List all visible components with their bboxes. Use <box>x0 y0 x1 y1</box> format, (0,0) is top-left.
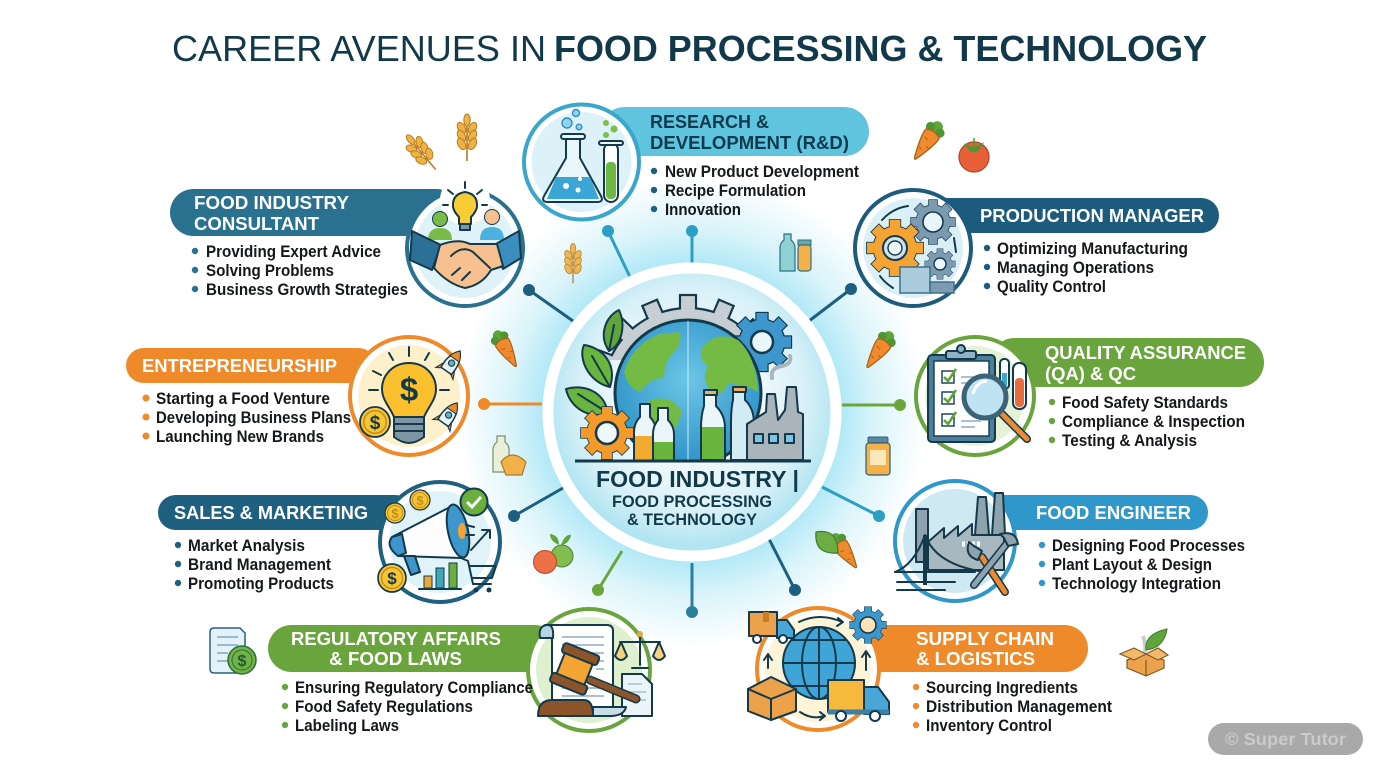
bullet list: Market Analysis <box>188 537 305 555</box>
badge circle <box>524 104 639 220</box>
icon: wheat centre-left <box>563 243 583 283</box>
panel: food industry consultant <box>170 175 523 306</box>
icon: gears and machine <box>863 198 963 298</box>
heading pill <box>990 338 1264 387</box>
icon: clipboard and magnifier <box>925 345 1027 446</box>
bullet list: Solving Problems <box>206 262 334 280</box>
icon: wheat left <box>399 128 444 176</box>
badge circle <box>895 481 1015 601</box>
icon: carrot left <box>487 326 524 371</box>
bullet list <box>175 537 334 593</box>
central hub <box>548 268 836 556</box>
heading pill <box>126 348 376 383</box>
icon: megaphone, coins and cart: $ <box>391 506 399 521</box>
panel: quality assurance <box>916 337 1264 455</box>
panel: food engineer <box>895 481 1245 601</box>
icon: factory <box>747 356 803 460</box>
heading pill <box>930 198 1219 233</box>
bullet list: Food Safety Regulations <box>295 698 473 716</box>
icon: wheat top <box>456 114 478 161</box>
bullet list: Promoting Products <box>188 575 334 593</box>
heading pill <box>268 625 558 672</box>
heading <box>194 193 349 234</box>
panel: supply chain <box>748 607 1112 735</box>
heading <box>291 629 501 669</box>
heading: SUPPLY CHAIN <box>916 629 1054 649</box>
icon: megaphone, coins and cart: $ <box>387 569 397 588</box>
bullet list: Sourcing Ingredients <box>926 679 1078 697</box>
icon: factory, bridge and wrench <box>895 489 1018 593</box>
icon: leaf and carrot <box>816 529 864 573</box>
badge circle <box>350 337 468 455</box>
heading <box>650 112 849 153</box>
heading pill <box>985 495 1208 530</box>
icon: globe, trucks, box and gear <box>748 607 889 722</box>
icon: tomato <box>959 138 989 172</box>
bullet list <box>913 679 1112 735</box>
bullet list: Managing Operations <box>997 259 1154 277</box>
background glow <box>457 177 927 647</box>
icon: document with coin <box>210 628 256 674</box>
bullet list: Quality Control <box>997 278 1106 296</box>
heading: ENTREPRENEURSHIP <box>142 356 337 376</box>
bullet list <box>192 243 408 299</box>
bullet list: Distribution Management <box>926 698 1112 716</box>
panel: regulatory affairs <box>268 609 665 735</box>
bullet list: Providing Expert Advice <box>206 243 381 261</box>
bullet list <box>282 679 533 735</box>
heading <box>916 629 1054 669</box>
watermark: © Super Tutor <box>1225 729 1346 749</box>
heading: SALES & MARKETING <box>174 503 368 523</box>
watermark <box>1208 723 1363 755</box>
heading: FOOD ENGINEER <box>1036 503 1191 523</box>
bullet list: Developing Business Plans <box>156 409 351 427</box>
heading: & LOGISTICS <box>916 649 1035 669</box>
hub heading: & TECHNOLOGY <box>627 510 758 529</box>
bullet list: Technology Integration <box>1052 575 1221 593</box>
icon: idea bulb, coin and rockets: $ <box>400 371 418 408</box>
bullet list <box>984 240 1188 296</box>
heading pill <box>170 189 460 236</box>
icon: handshake with idea bulb <box>410 175 521 298</box>
bullet list: Testing & Analysis <box>1062 432 1197 450</box>
bullet list <box>651 163 859 219</box>
heading: (QA) & QC <box>1045 364 1136 384</box>
heading pill <box>600 107 869 156</box>
badge circle <box>757 608 879 730</box>
icon: idea bulb, coin and rockets: $ <box>370 413 381 434</box>
heading: & FOOD LAWS <box>329 649 462 669</box>
badge circle <box>916 337 1034 455</box>
hub heading: FOOD INDUSTRY | <box>596 466 799 492</box>
hub heading <box>596 466 799 529</box>
heading: REGULATORY AFFAIRS <box>291 629 501 649</box>
icon: orange gear <box>581 407 633 459</box>
heading <box>1045 343 1246 384</box>
title <box>172 28 1207 69</box>
title: CAREER AVENUES IN <box>172 28 546 69</box>
bullet list: Inventory Control <box>926 717 1052 735</box>
panel: sales and marketing <box>158 482 500 602</box>
icon: leaves <box>566 310 622 415</box>
icon: globe <box>615 320 761 466</box>
bullet list: Plant Layout & Design <box>1052 556 1212 574</box>
icon: blue gear <box>733 313 791 371</box>
heading: FOOD INDUSTRY <box>194 193 349 213</box>
bullet list: Innovation <box>665 201 741 219</box>
icon: bottle and bowl <box>493 436 526 475</box>
bullet list <box>142 390 351 446</box>
icon: apple and tomato <box>534 534 573 574</box>
icon: carrot top right <box>906 116 949 165</box>
hub heading: FOOD PROCESSING <box>612 492 772 511</box>
heading: QUALITY ASSURANCE <box>1045 343 1246 363</box>
bullet list: Starting a Food Venture <box>156 390 330 408</box>
icon: bottles <box>634 387 754 460</box>
bullet list: Recipe Formulation <box>665 182 806 200</box>
bullet list: Ensuring Regulatory Compliance <box>295 679 533 697</box>
heading pill <box>158 495 413 530</box>
icon: idea bulb, coin and rockets <box>358 345 469 447</box>
bullet list <box>1049 394 1245 450</box>
bullet list: Launching New Brands <box>156 428 324 446</box>
badge circle <box>407 190 523 306</box>
bullet list <box>1039 537 1245 593</box>
icon: box with leaf <box>1120 629 1168 676</box>
icon: megaphone, coins and cart <box>378 488 496 593</box>
icon: bottle and jar <box>780 234 811 271</box>
badge circle <box>528 609 650 731</box>
bullet list: New Product Development <box>665 163 859 181</box>
bullet list: Labeling Laws <box>295 717 399 735</box>
icon: document with coin: $ <box>238 653 247 670</box>
badge circle <box>380 482 500 602</box>
bullet list: Brand Management <box>188 556 331 574</box>
icon: gavel, document and scales <box>536 617 665 723</box>
connector lines <box>478 225 906 618</box>
heading: CONSULTANT <box>194 214 319 234</box>
icon: megaphone, coins and cart: $ <box>416 493 424 508</box>
heading pill <box>860 625 1088 672</box>
panel: research and development <box>524 104 869 220</box>
ground line <box>575 460 811 462</box>
bullet list: Optimizing Manufacturing <box>997 240 1188 258</box>
bullet list: Designing Food Processes <box>1052 537 1245 555</box>
badge circle <box>855 190 971 306</box>
heading: PRODUCTION MANAGER <box>980 206 1204 226</box>
icon: carrot right <box>859 326 900 373</box>
title: FOOD PROCESSING & TECHNOLOGY <box>554 28 1207 69</box>
icon: flask and test tube <box>532 110 632 212</box>
icon: jar right <box>866 437 890 475</box>
icon: big grey gear <box>598 294 755 360</box>
bullet list: Business Growth Strategies <box>206 281 408 299</box>
bullet list: Food Safety Standards <box>1062 394 1228 412</box>
bullet list: Compliance & Inspection <box>1062 413 1245 431</box>
heading: RESEARCH & <box>650 112 769 132</box>
panel: production manager <box>855 190 1219 306</box>
panel: entrepreneurship <box>126 337 469 455</box>
heading: DEVELOPMENT (R&D) <box>650 133 849 153</box>
